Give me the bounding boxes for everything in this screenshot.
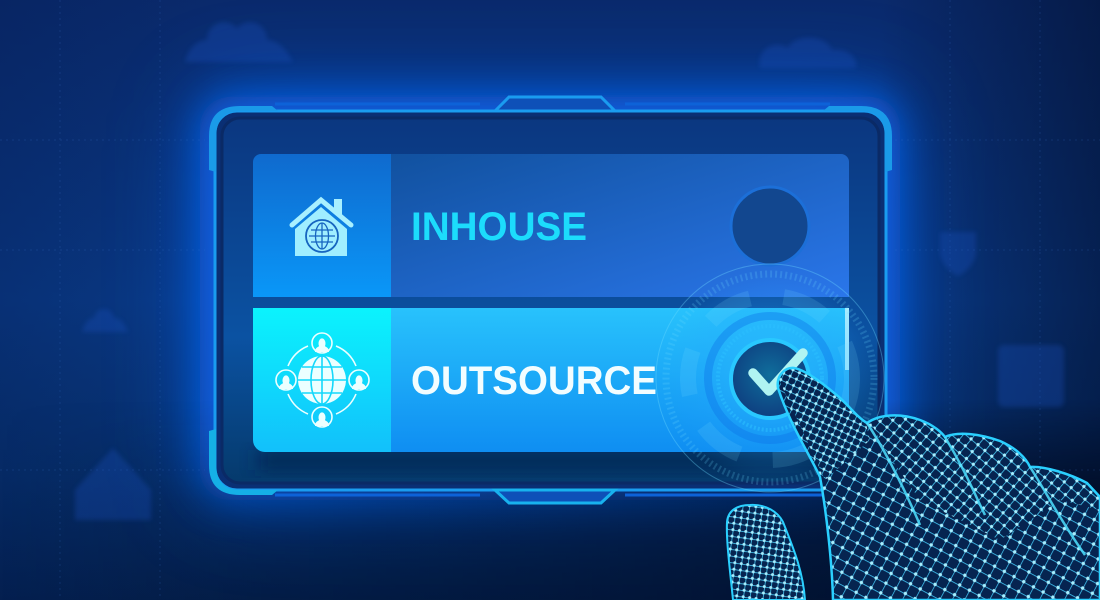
icon: house with globe <box>292 199 351 256</box>
icon: house <box>75 448 151 520</box>
icon: cloud <box>759 38 856 68</box>
finger creases <box>867 423 1085 555</box>
screen <box>215 111 886 490</box>
icon: calendar <box>998 345 1064 407</box>
mesh: knuckles <box>867 415 1100 540</box>
radio button: empty <box>731 187 809 265</box>
icon: people group <box>185 22 293 62</box>
label: inhouse: INHOUSE <box>411 205 587 249</box>
icon: shield <box>940 232 976 276</box>
thumb <box>727 505 805 600</box>
icon: check mark <box>753 353 803 391</box>
wireframe hand <box>727 360 1100 600</box>
shadow under rows <box>258 450 848 470</box>
panel: outsource row <box>253 308 849 452</box>
bezel corners <box>209 106 892 495</box>
index finger and back of hand <box>770 360 1100 600</box>
bottom tab <box>495 490 615 503</box>
label: outsource: OUTSOURCE <box>411 359 657 403</box>
mesh: index tip <box>780 370 870 478</box>
radio button: checked <box>731 340 809 418</box>
device frame <box>209 97 892 503</box>
panel: inhouse row <box>253 154 849 297</box>
icon: globe with people <box>276 333 369 427</box>
top tab <box>495 97 615 111</box>
faint background icons <box>75 22 1064 520</box>
radial tech dial <box>656 264 884 492</box>
icon: team <box>82 309 128 332</box>
